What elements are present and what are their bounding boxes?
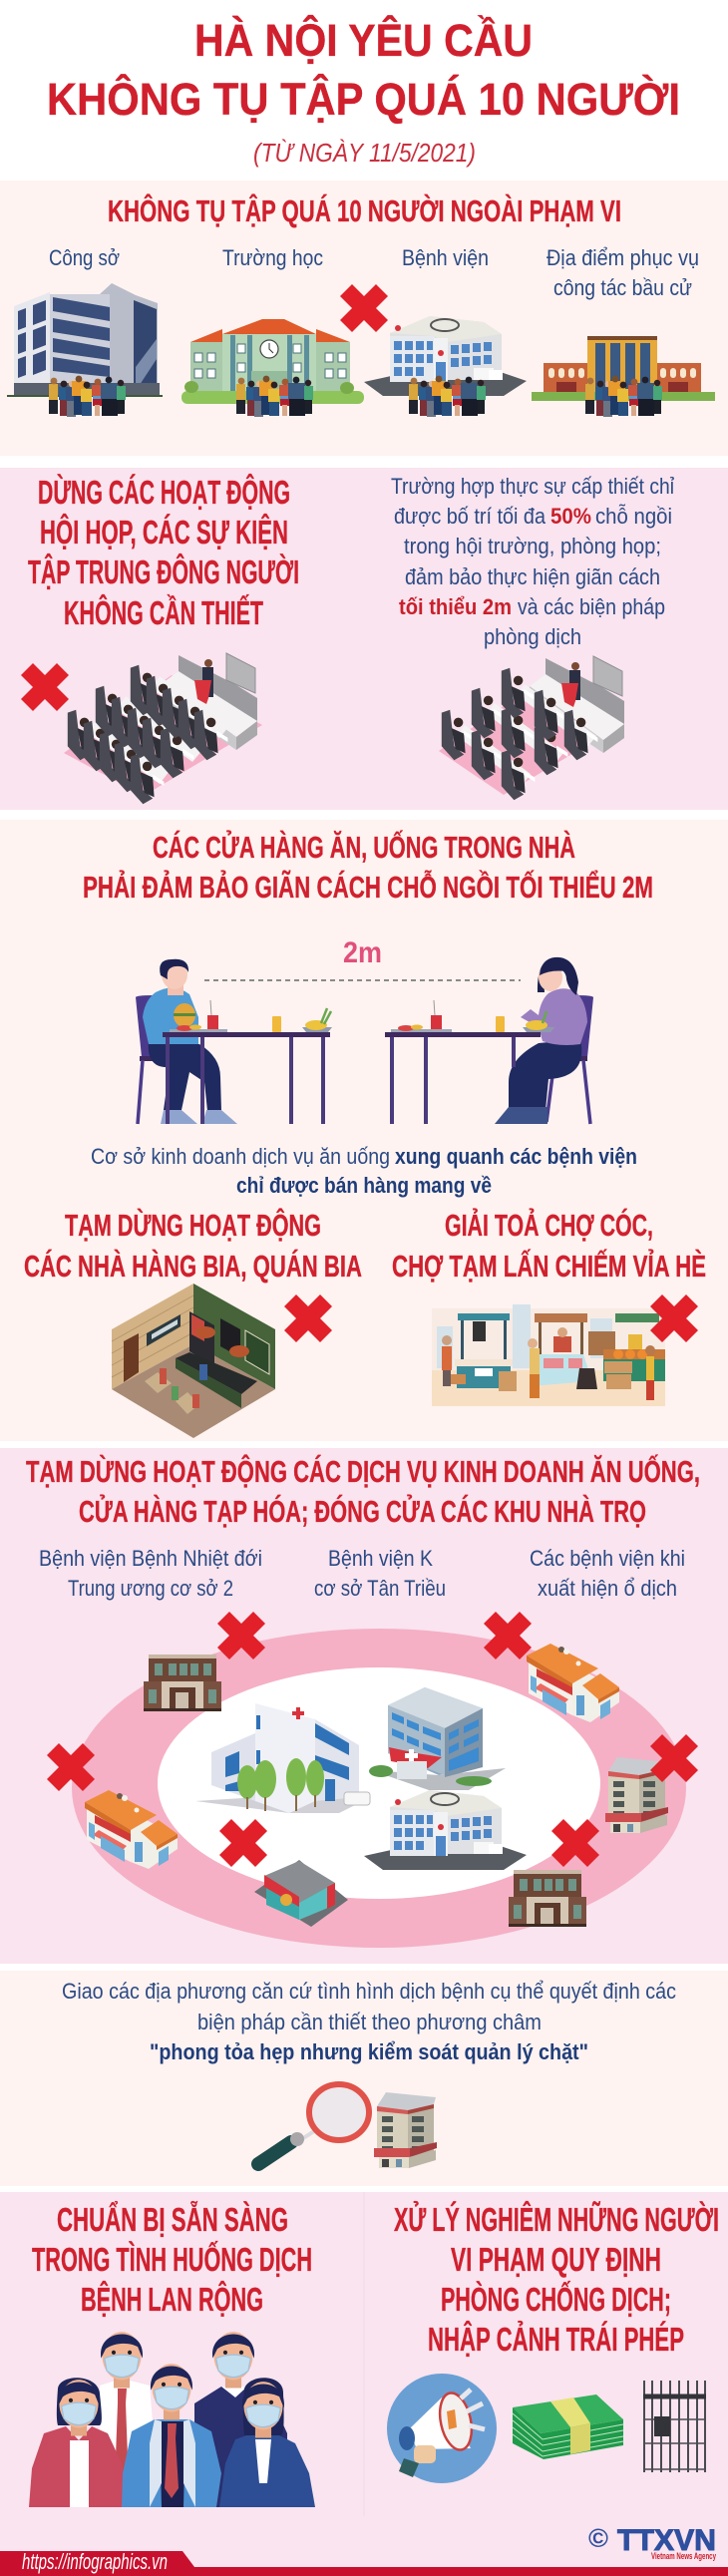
heading: beer halls: CÁC NHÀ HÀNG BIA, QUÁN BIA [24, 1249, 362, 1284]
heading: HỘI HỌP, CÁC SỰ KIỆN [40, 513, 288, 551]
text block: "phong tỏa hẹp nhưng kiểm soát quản lý chặt" [150, 2039, 588, 2064]
icon: crowd at hospital [409, 376, 486, 417]
location labels: Công sở [49, 245, 120, 270]
icon: red X [217, 1612, 265, 1659]
text block: exceptions: đảm bảo thực hiện giãn cách [405, 564, 660, 589]
text block: take-away rule: chỉ được bán hàng mang về [236, 1173, 492, 1198]
logo: TTXVN: © [588, 2523, 608, 2553]
location labels: công tác bầu cử [553, 275, 692, 300]
illustration: right table [385, 1000, 554, 1124]
icon: red X [47, 1743, 95, 1791]
icon: apartment block [374, 2092, 437, 2168]
heading: KHÔNG CẦN THIẾT [64, 593, 263, 631]
text block: exceptions [391, 474, 674, 649]
panel: restaurants [0, 820, 728, 1441]
text block: take-away rule: Cơ sở kinh doanh dịch vụ ăn uống [91, 1144, 390, 1169]
logo: TTXVN: TTXVN [617, 2524, 716, 2557]
hospital labels: Bệnh viện Bệnh Nhiệt đới [39, 1546, 262, 1571]
icon: red X [650, 1294, 698, 1342]
icon: hospital with helipad [364, 1790, 527, 1870]
text block: exceptions: 50% [550, 504, 591, 529]
icon: hospital [364, 316, 527, 396]
illustration: masked people [29, 2332, 315, 2507]
heading [26, 1453, 700, 1529]
icon: red X [340, 284, 388, 332]
icon: crowded meeting room [64, 653, 262, 804]
icon: crowd at school [236, 376, 313, 417]
icon: crowd at hall [585, 376, 662, 417]
hospital labels: Trung ương cơ sở 2 [68, 1576, 233, 1601]
footer bar: https://infographics.vn [22, 2549, 168, 2574]
logo: TTXVN [588, 2523, 716, 2561]
icon: office building [7, 283, 163, 397]
heading: TẬP TRUNG ĐÔNG NGƯỜI [28, 552, 299, 590]
text block: take-away rule [91, 1144, 637, 1198]
heading: prepare: BỆNH LAN RỘNG [81, 2280, 263, 2318]
hospital labels [39, 1546, 685, 1601]
text block: exceptions: chỗ ngồi [595, 504, 672, 529]
icon: street market [432, 1304, 665, 1406]
heading: DỪNG CÁC HOẠT ĐỘNG [38, 473, 290, 511]
icon: red X [484, 1612, 532, 1659]
icon: white hospital [195, 1703, 371, 1813]
icon: spaced meeting room [439, 656, 624, 800]
icon: orange store [527, 1644, 619, 1722]
icon: red X [284, 1294, 332, 1342]
icon: red X [219, 1819, 267, 1867]
text block: exceptions: phòng dịch [484, 624, 581, 649]
heading: prepare: CHUẨN BỊ SẴN SÀNG [57, 2201, 288, 2238]
heading: punish [394, 2201, 719, 2358]
heading: prepare [32, 2201, 312, 2318]
title: HÀ NỘI YÊU CẦU [194, 15, 533, 66]
hospital labels: Các bệnh viện khi [530, 1546, 685, 1571]
icon: brown building [509, 1870, 586, 1927]
ring diagram [47, 1612, 698, 1948]
illustration: man at table [136, 959, 237, 1124]
text block: exceptions: được bố trí tối đa [394, 504, 546, 529]
text block: Giao các địa phương căn cứ tình hình dịch bệnh cụ thể quyết định các [62, 1979, 676, 2004]
icon: money [513, 2394, 623, 2459]
panel: stop gatherings [0, 468, 728, 810]
icon: corner shop [254, 1860, 348, 1927]
panel: prepare and punish [0, 2192, 728, 2576]
heading: prepare: TRONG TÌNH HUỐNG DỊCH [32, 2240, 312, 2278]
icon: red X [21, 663, 69, 711]
icon: beer hall [112, 1284, 275, 1438]
icon: crowd at office [49, 376, 126, 417]
title: (TỪ NGÀY 11/5/2021) [253, 138, 476, 168]
title [47, 15, 680, 168]
distance line [204, 979, 521, 981]
text block: exceptions: Trường hợp thực sự cấp thiết chỉ [391, 474, 674, 499]
panel: no gatherings outside [0, 181, 728, 456]
heading: markets [392, 1207, 706, 1284]
hospital labels: xuất hiện ổ dịch [538, 1576, 677, 1601]
icon: brown building [144, 1655, 221, 1711]
location labels: Trường học [222, 245, 323, 270]
icon: red X [650, 1734, 698, 1782]
text block: exceptions: và các biện pháp [518, 594, 665, 619]
panel: local measures [0, 1971, 728, 2186]
panel: hospital surroundings [0, 1448, 728, 1964]
text block: exceptions: tối thiểu 2m [399, 594, 512, 619]
heading: beer halls [24, 1207, 362, 1284]
location labels [49, 245, 699, 300]
location labels: Bệnh viện [402, 245, 489, 270]
text block: exceptions: trong hội trường, phòng họp; [404, 534, 661, 558]
icon: jail bars [643, 2381, 706, 2472]
heading [83, 829, 653, 905]
icon: blue hospital tower [369, 1687, 506, 1790]
icon: polling hall [532, 336, 715, 401]
hospital labels: cơ sở Tân Triều [314, 1576, 446, 1601]
icon: orange store [85, 1790, 178, 1869]
text block [62, 1979, 676, 2064]
location labels: Địa điểm phục vụ [546, 245, 699, 270]
heading [28, 473, 299, 631]
illustration: woman at table [495, 957, 593, 1124]
text block: take-away rule: xung quanh các bệnh viện [395, 1144, 637, 1169]
icon: magnifier [258, 2084, 369, 2164]
heading: beer halls: TẠM DỪNG HOẠT ĐỘNG [65, 1207, 321, 1243]
footer bar [0, 2549, 728, 2576]
hospital labels: Bệnh viện K [328, 1546, 433, 1571]
title: KHÔNG TỤ TẬP QUÁ 10 NGƯỜI [47, 74, 680, 125]
icon: apartment block [605, 1757, 668, 1833]
text block: biện pháp cần thiết theo phương châm [197, 2010, 542, 2034]
icon: school [182, 319, 364, 404]
icon: megaphone [387, 2374, 497, 2483]
icon: red X [551, 1819, 599, 1867]
illustration: left table [163, 1000, 332, 1124]
distance label: 2m [343, 936, 382, 969]
